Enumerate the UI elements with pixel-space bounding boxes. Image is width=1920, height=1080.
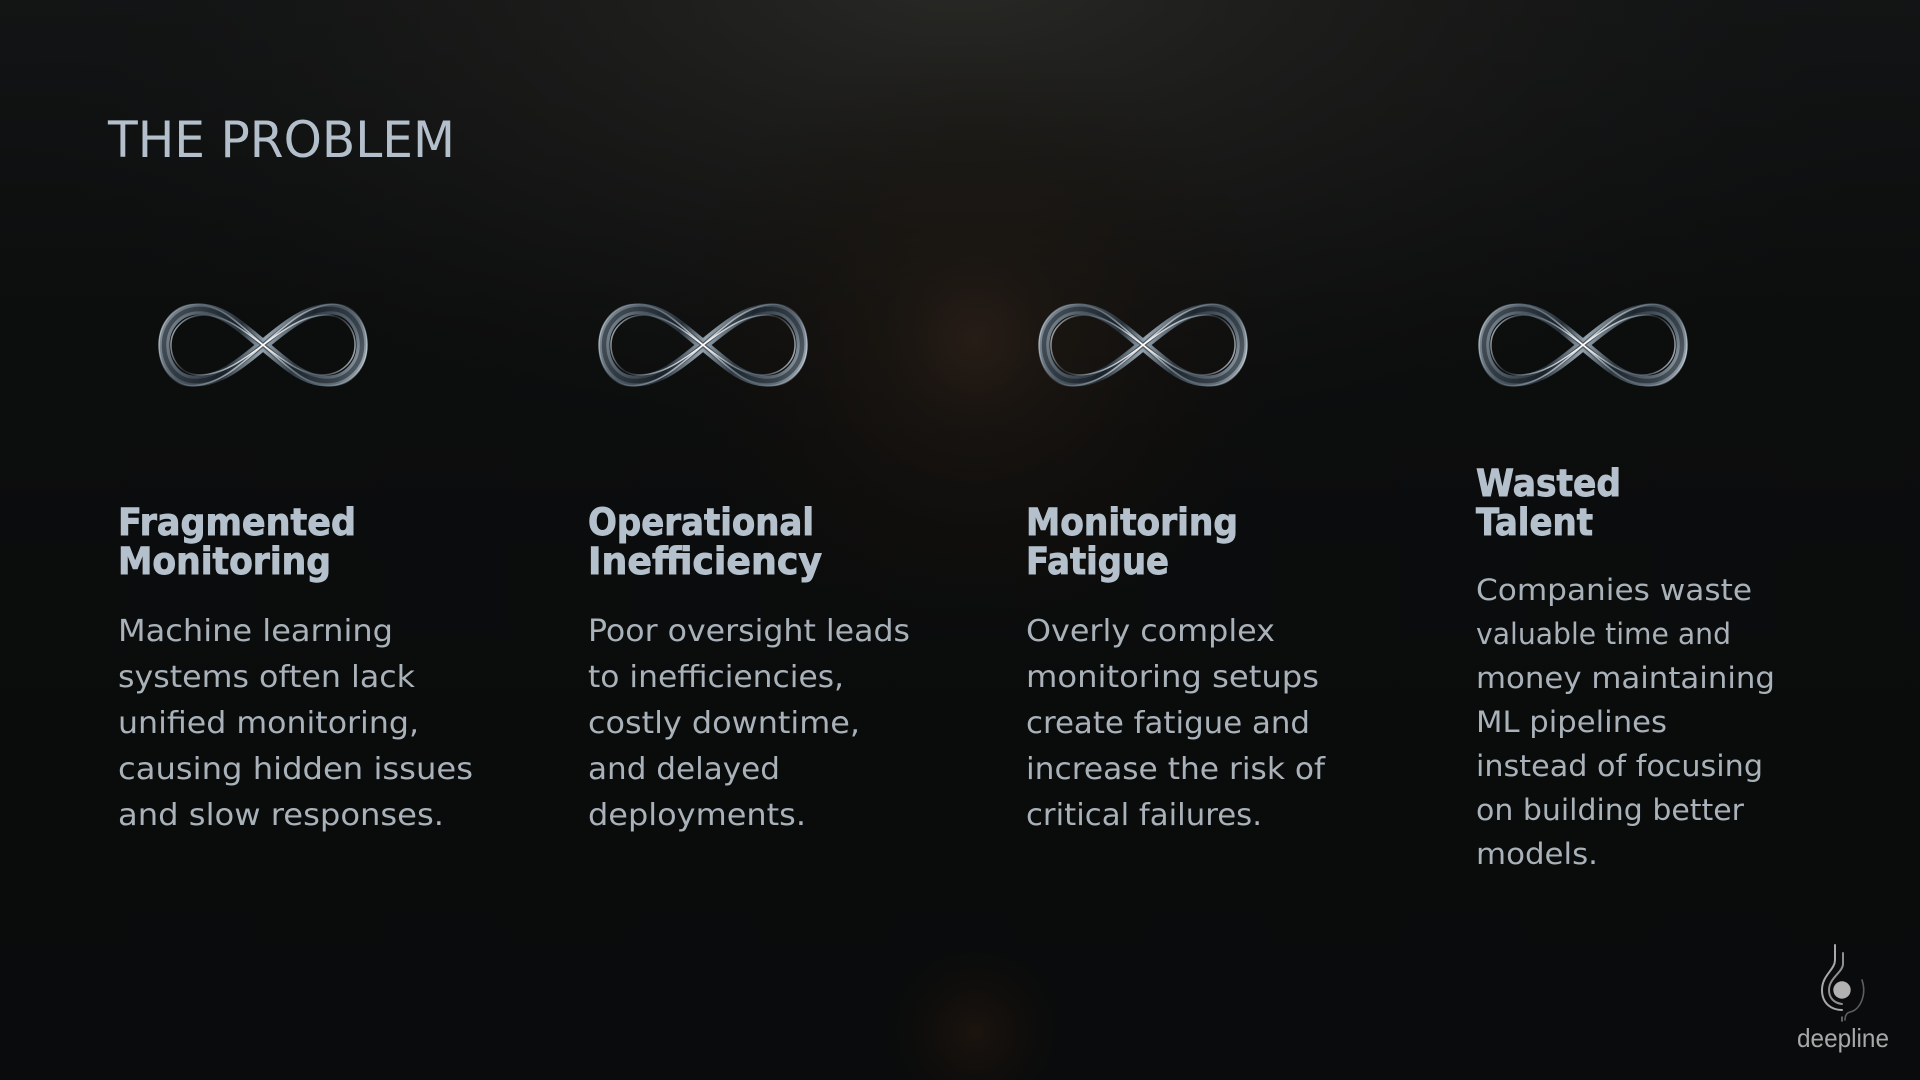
panel: wasted talent — [1476, 304, 1775, 871]
text block: fragmented monitoring description: unified monitoring, — [118, 706, 419, 741]
text block: monitoring fatigue description: critical failures. — [1026, 798, 1262, 833]
text block: monitoring fatigue description: monitoring setups — [1026, 660, 1319, 695]
text block: operational inefficiency description: costly downtime, — [588, 706, 860, 741]
heading: monitoring fatigue: Monitoring — [1026, 501, 1238, 544]
text block: fragmented monitoring description: causing hidden issues — [118, 752, 473, 787]
text block: fragmented monitoring description — [118, 614, 473, 833]
text block: wasted talent description: money maintaining — [1476, 661, 1775, 695]
title: THE PROBLEM — [107, 111, 455, 169]
icon: deepline mark — [1822, 945, 1864, 1021]
text block: fragmented monitoring description: systems often lack — [118, 660, 416, 695]
heading: wasted talent: Talent — [1476, 501, 1593, 544]
text block: operational inefficiency description: deployments. — [588, 798, 806, 833]
text block: fragmented monitoring description: and slow responses. — [118, 798, 444, 833]
text block: operational inefficiency description: and delayed — [588, 752, 780, 787]
text block: monitoring fatigue description: increase the risk of — [1026, 752, 1326, 787]
text block: fragmented monitoring description: Machine learning — [118, 614, 393, 649]
heading: fragmented monitoring: Monitoring — [118, 540, 331, 583]
icon: infinity ring 3 — [1039, 304, 1247, 386]
heading: monitoring fatigue: Fatigue — [1026, 540, 1169, 583]
text block: monitoring fatigue description — [1026, 614, 1326, 833]
heading: operational inefficiency: Operational — [588, 501, 814, 544]
heading: wasted talent: Wasted — [1476, 462, 1621, 505]
heading: operational inefficiency — [588, 501, 822, 583]
text block: wasted talent description: models. — [1476, 837, 1598, 871]
text block: wasted talent description — [1476, 573, 1775, 871]
icon: infinity ring 4 — [1479, 304, 1687, 386]
text block: operational inefficiency description: to inefficiencies, — [588, 660, 844, 695]
wordmark: deepline — [1797, 1023, 1889, 1053]
heading: fragmented monitoring: Fragmented — [118, 501, 356, 544]
text block: operational inefficiency description: Poor oversight leads — [588, 614, 910, 649]
heading: fragmented monitoring — [118, 501, 356, 583]
panel: fragmented monitoring — [118, 304, 473, 833]
heading: operational inefficiency: Inefficiency — [588, 540, 822, 583]
text block: wasted talent description: valuable time and — [1476, 617, 1731, 651]
text block: monitoring fatigue description: Overly complex — [1026, 614, 1275, 649]
panel: operational inefficiency — [588, 304, 910, 833]
icon: infinity ring 1 — [159, 304, 367, 386]
text block: wasted talent description: ML pipelines — [1476, 705, 1667, 739]
panel: monitoring fatigue — [1026, 304, 1326, 833]
text block: wasted talent description: instead of focusing — [1476, 749, 1763, 783]
icon: infinity ring 2 — [599, 304, 807, 386]
logo: deepline — [1797, 945, 1889, 1053]
heading: wasted talent — [1476, 462, 1621, 544]
heading: monitoring fatigue — [1026, 501, 1238, 583]
text block: wasted talent description: Companies waste — [1476, 573, 1752, 607]
text block: wasted talent description: on building better — [1476, 793, 1744, 827]
text block: monitoring fatigue description: create fatigue and — [1026, 706, 1310, 741]
text block: operational inefficiency description — [588, 614, 910, 833]
